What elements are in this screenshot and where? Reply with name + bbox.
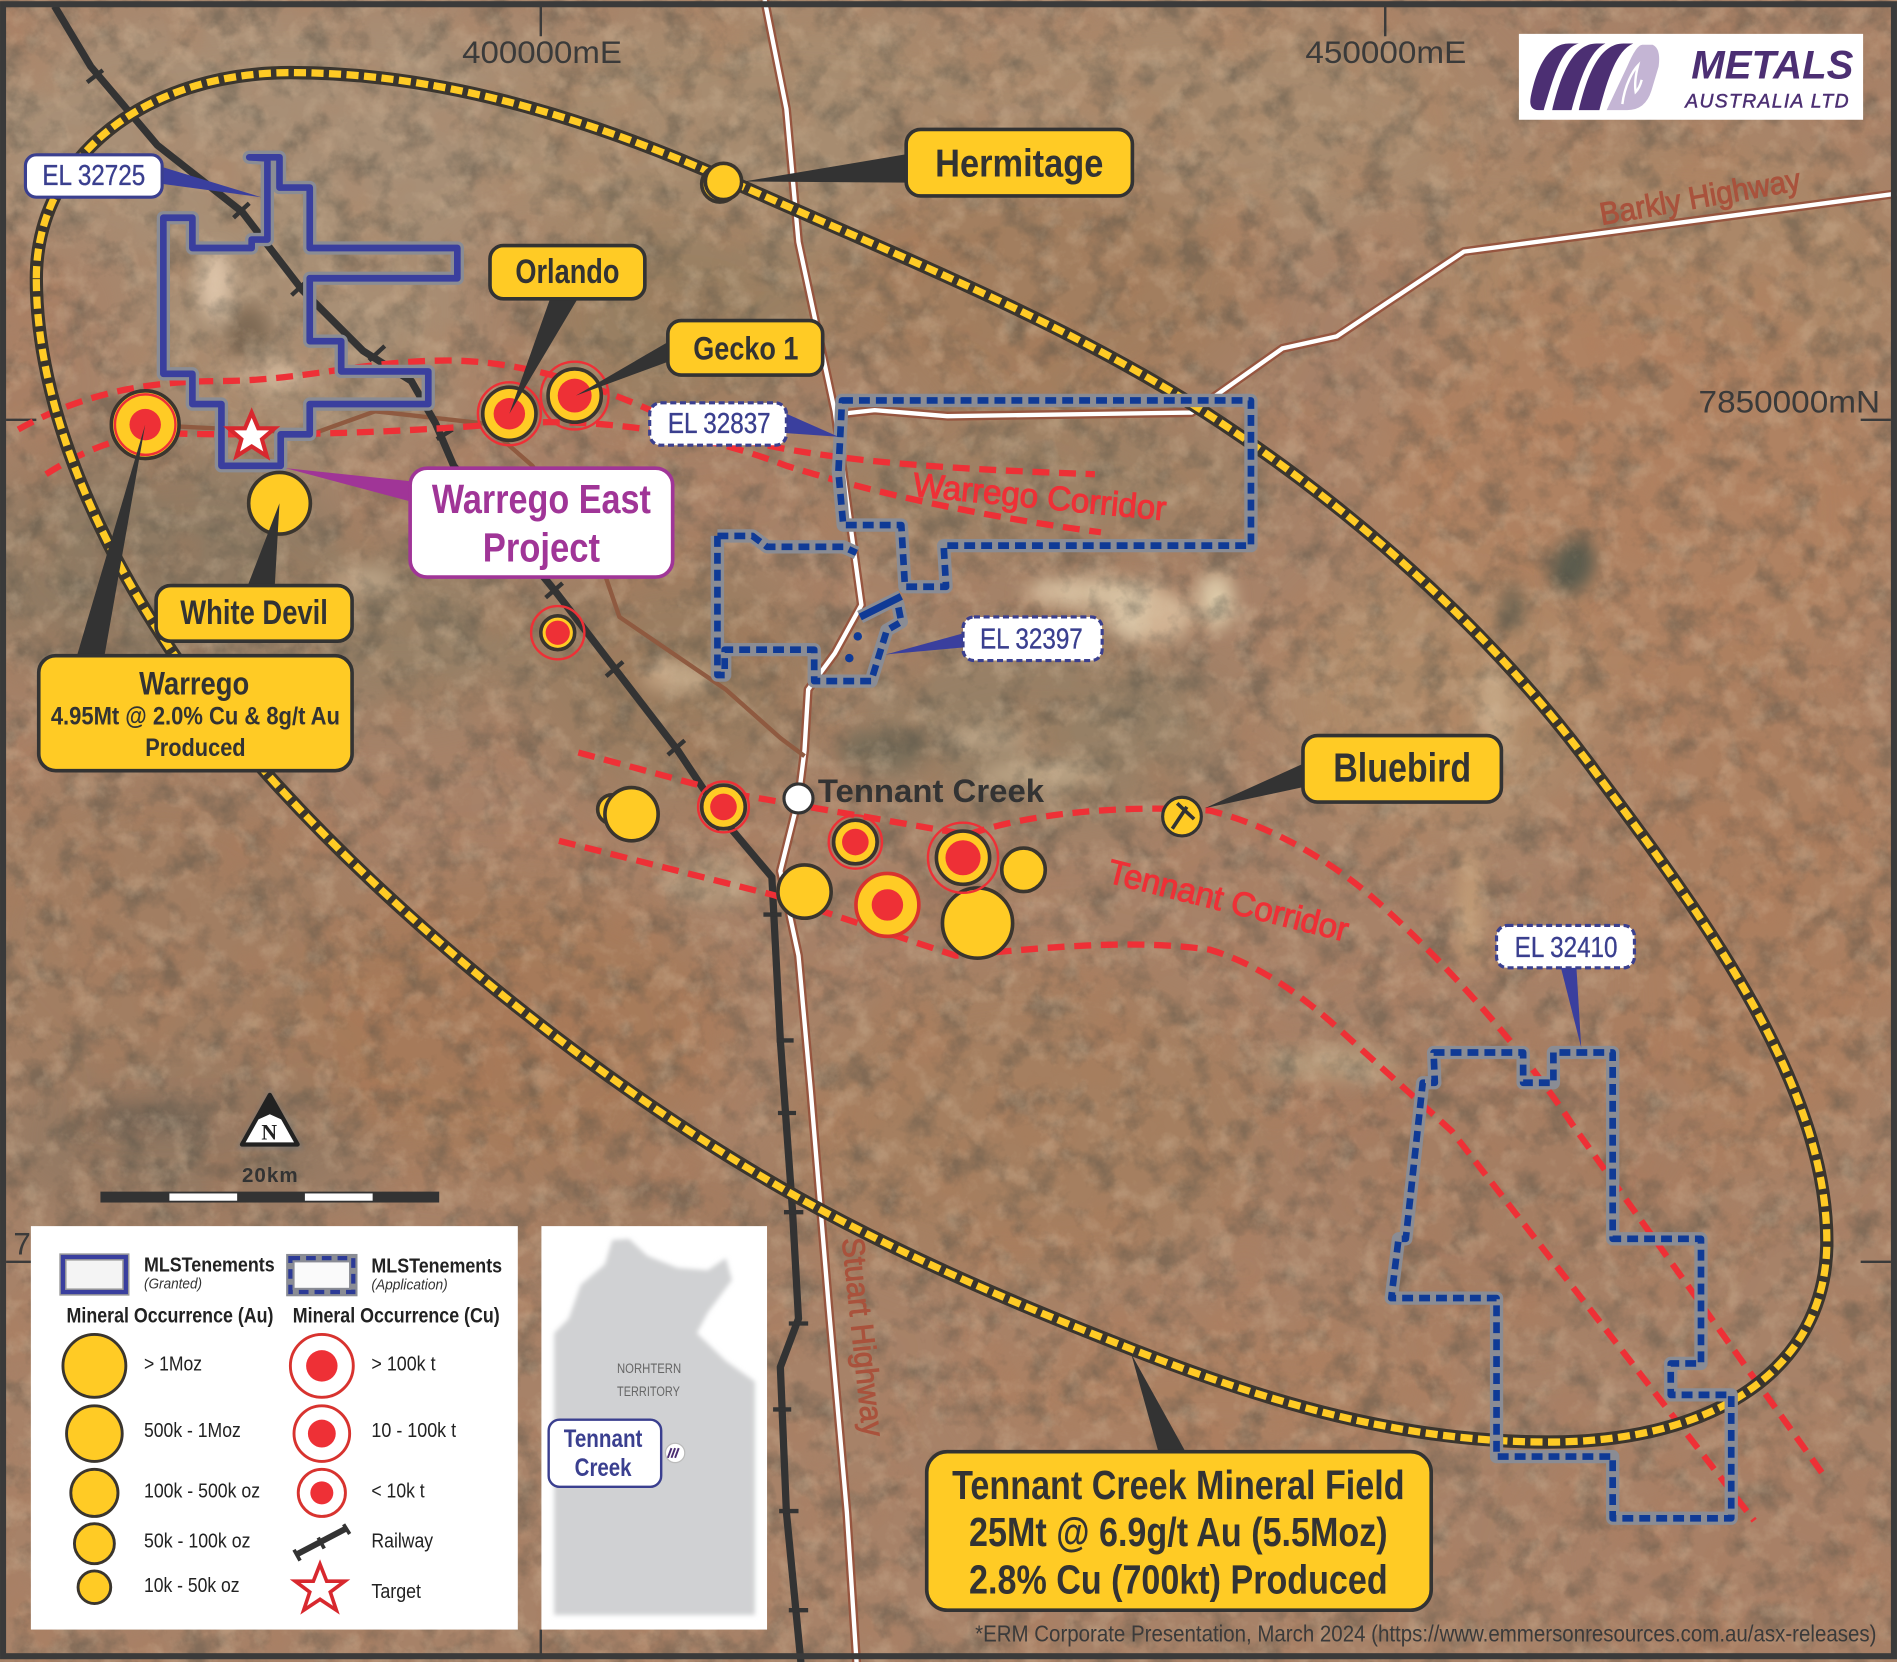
legend swatch: application tenements: (Application) (371, 1277, 448, 1294)
tenement: EL 32725 granted (163, 157, 457, 466)
legend swatch: application tenements: MLSTenements (371, 1256, 502, 1278)
legend: gold labels (144, 1353, 260, 1597)
legend icon: target star (295, 1564, 345, 1610)
label: Warrego East Project (286, 468, 673, 577)
legend: copper labels: > 100k t (371, 1353, 436, 1376)
corridor label: Warrego Corridor: Warrego Corridor (911, 466, 1168, 528)
legend: gold labels: > 1Moz (144, 1353, 202, 1376)
label: White Devil (156, 503, 352, 641)
grid ticks and coordinate labels: 400000mE (462, 35, 622, 70)
legend: gold labels: 50k - 100k oz (144, 1529, 250, 1552)
legend: gold labels: 100k - 500k oz (144, 1480, 260, 1503)
territory label (617, 1360, 681, 1399)
label: Warrego East Project: Warrego East (432, 476, 651, 522)
label: Hermitage: Hermitage (935, 143, 1103, 186)
label: Warrego (39, 425, 352, 771)
label: Tennant Creek Mineral Field: 2.8% Cu (700kt) Produced (969, 1556, 1388, 1602)
grid ticks and coordinate labels: 450000mE (1305, 35, 1466, 70)
north arrow: N (261, 1121, 277, 1145)
Tennant Creek Mineral Field ellipse (36, 73, 1827, 1442)
Tennant Creek callout: Creek (575, 1454, 632, 1482)
legend heading: copper: Mineral Occurrence (Cu) (293, 1304, 500, 1327)
Warrego and Tennant corridor lines (18, 361, 1827, 1521)
tenement: EL 32410 application (1391, 1053, 1731, 1518)
grid ticks and coordinate labels: 7850000mN (1699, 385, 1880, 420)
label: EL 32725: EL 32725 (42, 160, 145, 192)
inset location map (541, 1226, 767, 1630)
label: Orlando: Orlando (515, 253, 619, 291)
label: Warrego East Project: Project (483, 524, 600, 570)
legend: copper sizes (290, 1334, 353, 1516)
label: Gecko 1 (576, 321, 823, 396)
label: Tennant Creek Mineral Field: Tennant Creek Mineral Field (952, 1462, 1405, 1508)
label: Hermitage (744, 129, 1132, 196)
legend swatch: granted tenements (63, 1254, 275, 1292)
label: Tennant Creek Mineral Field: 25Mt @ 6.9g/t Au (5.5Moz) (969, 1509, 1388, 1555)
label: Orlando (490, 246, 645, 414)
label: EL 32410 (1497, 925, 1634, 1048)
road label: Stuart Highway: Stuart Highway (835, 1236, 891, 1438)
Metals Australia logo: AUSTRALIA LTD (1684, 91, 1849, 113)
label: EL 32397: EL 32397 (980, 623, 1083, 655)
territory label: NORHTERN (617, 1360, 681, 1376)
label: White Devil: White Devil (180, 594, 328, 632)
scale bar: 20km (242, 1164, 298, 1187)
legend swatch: granted tenements: (Granted) (144, 1275, 202, 1292)
Metals Australia logo: METALS (1691, 44, 1854, 88)
label: EL 32397 (886, 617, 1102, 661)
Metals Australia logo (1519, 34, 1863, 120)
minor road (163, 411, 805, 756)
legend: copper labels: < 10k t (371, 1480, 425, 1503)
label: Gecko 1: Gecko 1 (693, 329, 798, 366)
location marker (665, 1443, 685, 1463)
legend panel (31, 1226, 518, 1630)
Tennant Creek callout (549, 1420, 661, 1487)
legend: copper labels: Railway (371, 1529, 434, 1552)
label: Bluebird with mine icon: Bluebird (1333, 745, 1471, 791)
label: EL 32725 (25, 155, 261, 197)
label: Warrego: 4.95Mt @ 2.0% Cu & 8g/t Au (51, 703, 340, 731)
Tennant Creek callout: Tennant (564, 1425, 643, 1453)
territory label: TERRITORY (617, 1383, 680, 1399)
scale bar (100, 1164, 439, 1203)
legend: copper labels: 10 - 100k t (371, 1419, 456, 1442)
occurrence circles: gold and copper (111, 163, 1045, 958)
legend icon: railway (294, 1524, 350, 1561)
label: EL 32837 (650, 403, 838, 445)
legend: gold sizes (63, 1334, 126, 1604)
legend heading: gold: Mineral Occurrence (Au) (67, 1304, 273, 1327)
legend: copper labels: Target (371, 1580, 421, 1603)
town marker: Tennant Creek: Tennant Creek (818, 772, 1045, 809)
label: Warrego: Produced (145, 734, 246, 762)
legend: gold labels: 10k - 50k oz (144, 1574, 240, 1597)
label: EL 32410: EL 32410 (1515, 932, 1618, 964)
Barkly Highway road (842, 194, 1897, 416)
north arrow (236, 1089, 304, 1149)
tenement: EL 32397 application (717, 536, 901, 681)
corridor label: Tennant Corridor: Tennant Corridor (1104, 853, 1352, 949)
legend swatch: application tenements (290, 1256, 502, 1294)
road label: Barkly Highway: Barkly Highway (1597, 162, 1803, 232)
label: EL 32837: EL 32837 (668, 408, 771, 440)
Stuart Highway road (765, 0, 861, 1662)
legend swatch: granted tenements: MLSTenements (144, 1254, 275, 1276)
label: Tennant Creek Mineral Field (927, 1354, 1431, 1610)
legend: gold labels: 500k - 1Moz (144, 1419, 241, 1442)
grid ticks and coordinate labels: 7 (13, 1227, 31, 1262)
tenement: EL 32837 application (838, 400, 1251, 587)
Northern Territory shape (554, 1239, 755, 1615)
legend: copper labels (371, 1353, 456, 1603)
target star (229, 413, 275, 456)
label: Bluebird with mine icon (1163, 736, 1501, 836)
railway (54, 6, 808, 1662)
label: Warrego: Warrego (139, 664, 249, 701)
